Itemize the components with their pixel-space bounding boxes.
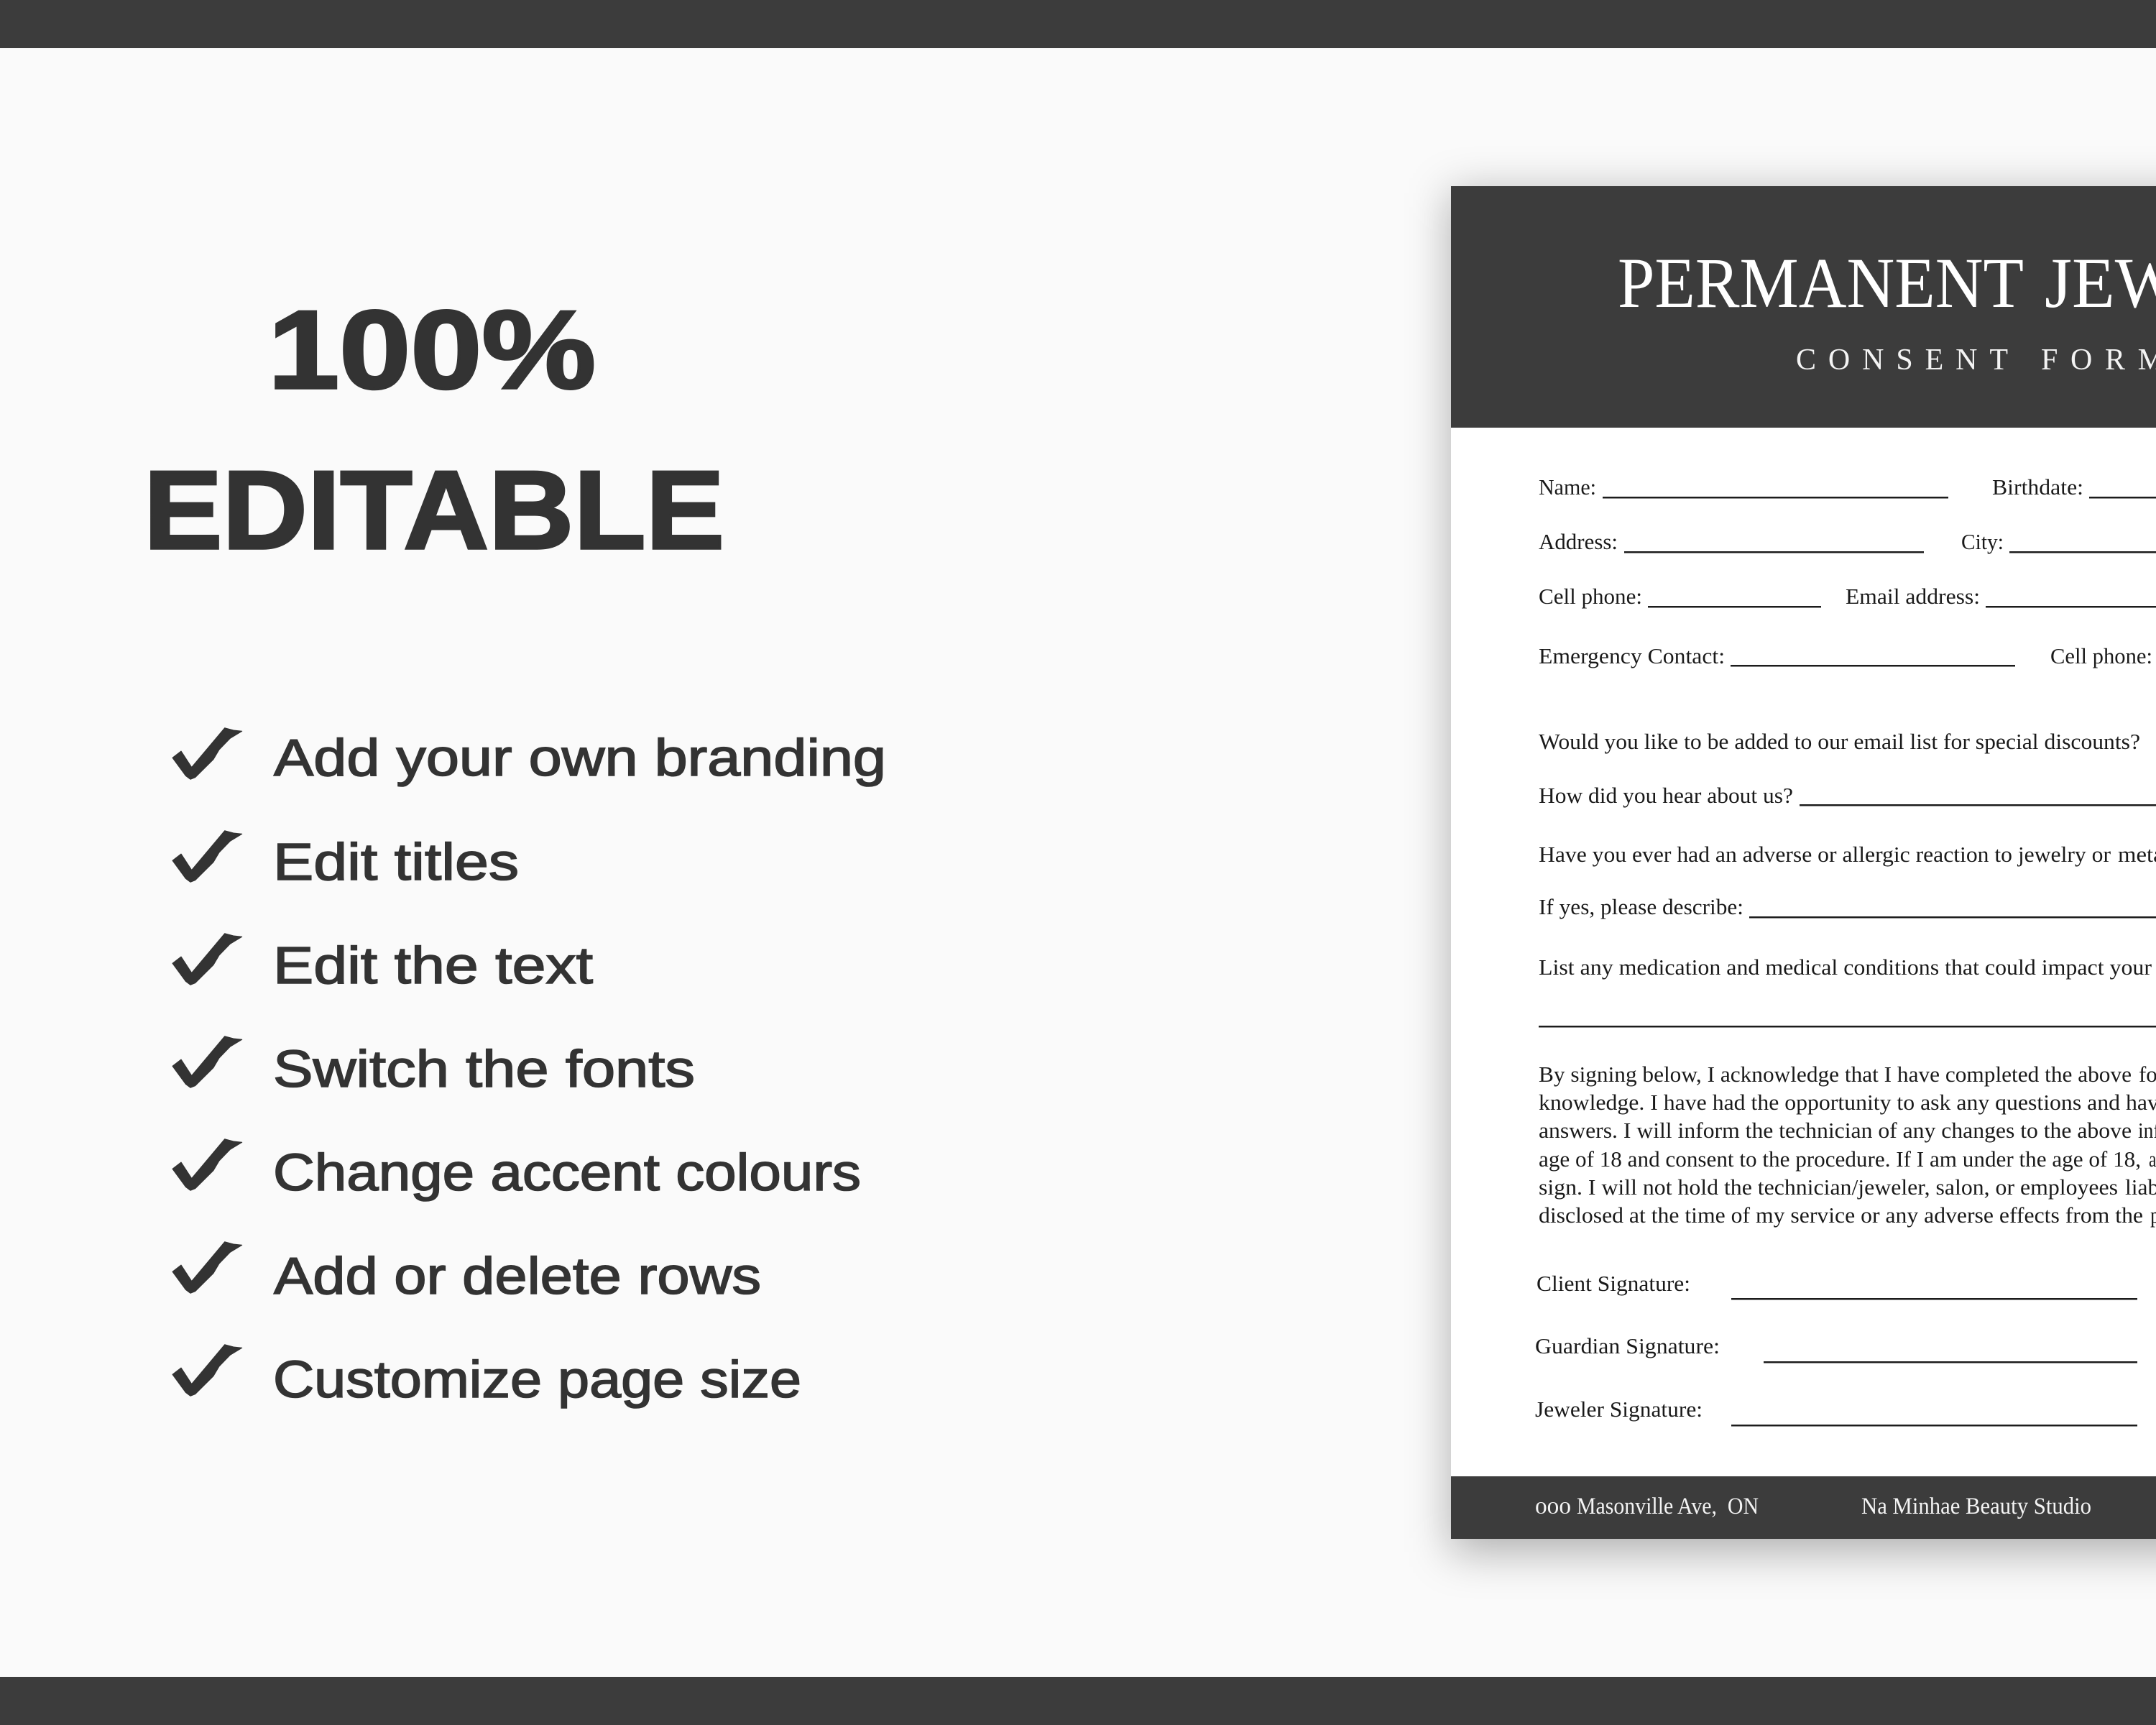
item: switch the fonts [172,1036,695,1098]
item: edit the text [172,934,593,995]
item: add or delete rows [172,1242,761,1305]
contact fields: Email address: [1846,584,1980,609]
form subtitle: CONSENT [1796,344,2008,377]
form page drop shadow [1450,193,2156,1552]
signature lines: Jeweler Signature: [1535,1397,1703,1422]
contact fields: Cell phone: [1539,584,1642,609]
item: edit the text: Edit the text [273,937,593,995]
form footer band [1451,1476,2156,1539]
contact fields: Cell phone: [2050,643,2152,668]
form paper [1451,186,2156,1539]
form footer band: 000 [1535,1499,1571,1518]
top dark band [0,0,2156,48]
item: add or delete rows: Add or delete rows [274,1248,761,1305]
contact fields: Name: [1539,474,1596,500]
bottom dark band [0,1677,2156,1725]
item: customize page size: Customize page size [273,1351,801,1409]
contact fields: City: [1961,529,2004,554]
item: edit titles [172,831,519,891]
feature checklist [172,728,886,1409]
questions: If yes, please describe: [1539,894,1743,919]
contact fields: Birthdate: [1992,474,2083,500]
acknowledgement paragraph [1539,1062,2156,1228]
heading: 100% editable: EDITABLE [144,448,724,572]
item: change accent colours: Change accent colours [273,1144,861,1202]
acknowledgement paragraph: disclosed at the time of my service or any adverse effects from the [1539,1202,2143,1228]
form footer band: Masonville Ave, ON [1577,1494,1759,1519]
heading: 100% editable [144,288,724,572]
acknowledgement paragraph: knowledge. I have had the opportunity to ask any questions and [1539,1090,2120,1115]
item: add your own branding: Add your own branding [274,730,886,787]
questions: Would you like to be added to our email list for special discounts? [1539,729,2140,754]
contact fields: Address: [1539,529,1618,554]
signature lines: Guardian Signature: [1535,1333,1720,1358]
form subtitle [1796,344,2156,377]
signature lines [1535,1271,2137,1426]
questions: List any medication and medical conditions that could impact your [1539,954,2152,980]
questions: How did you hear about us? [1539,783,1793,808]
item: edit titles: Edit titles [273,834,519,891]
acknowledgement paragraph: age of 18 and consent to the procedure. If I am under the age of 18, [1539,1146,2141,1172]
signature lines: Client Signature: [1537,1271,1690,1296]
form title: PERMANENT [1618,243,2024,323]
acknowledgement paragraph: sign. I will not hold the technician/jeweler, salon, or employees [1539,1174,2118,1200]
form footer band: Na Minhae Beauty Studio [1861,1494,2091,1519]
form header band [1451,186,2156,428]
acknowledgement paragraph: By signing below, I acknowledge that I have completed the above [1539,1062,2132,1087]
consent form page [1451,186,2156,1539]
questions: Have you ever had an adverse or allergic reaction to jewelry or [1539,842,2111,867]
heading: 100% editable: 100% [268,288,596,412]
item: switch the fonts: Switch the fonts [273,1041,695,1098]
questions [1539,729,2156,1028]
acknowledgement paragraph: answers. I will inform the technician of any changes to the above [1539,1118,2132,1143]
contact fields: Emergency Contact: [1539,643,1725,668]
item: customize page size [172,1345,801,1409]
contact fields [1539,474,2156,668]
